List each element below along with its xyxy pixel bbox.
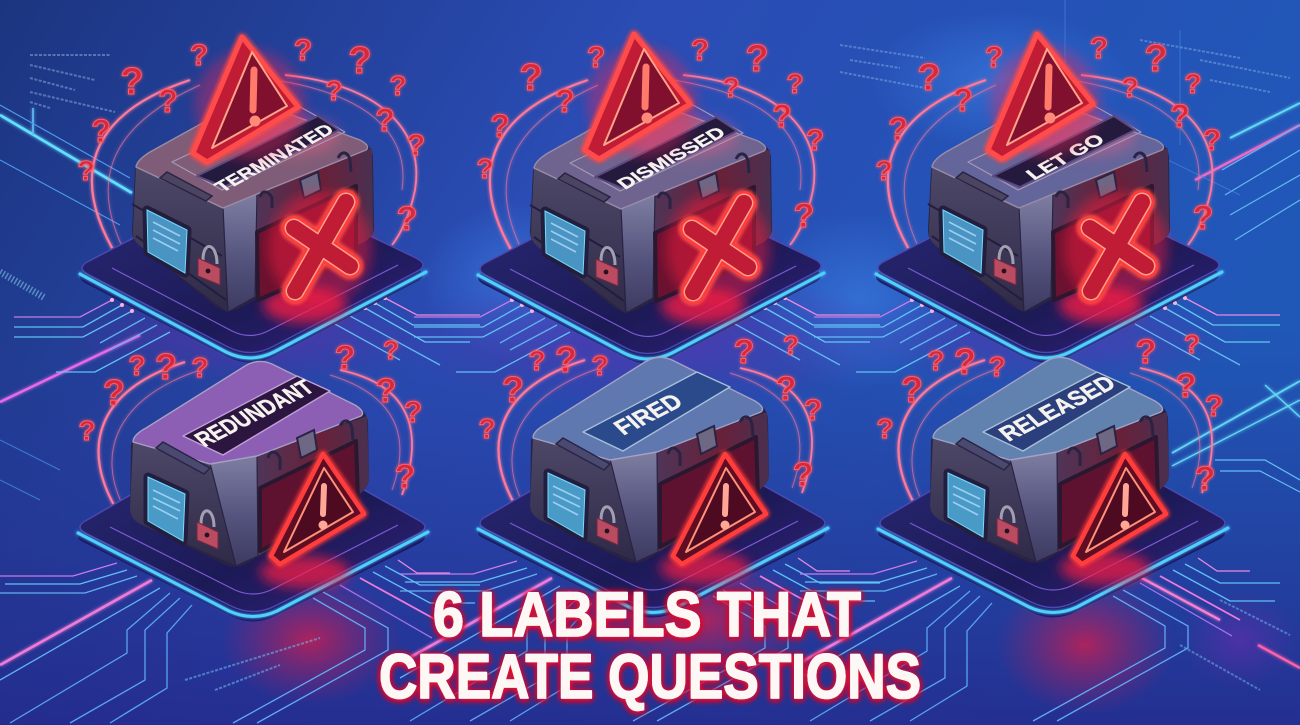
crate 6: Released [876, 329, 1228, 618]
question marks: ? [555, 83, 575, 119]
question marks: ? [490, 108, 510, 144]
label: Fired: FIRED [608, 389, 688, 439]
label: Redundant: REDUNDANT [189, 375, 320, 451]
question marks: ? [1144, 38, 1168, 80]
question marks: ? [772, 98, 792, 134]
question marks: ? [294, 34, 312, 67]
question marks: ? [395, 458, 415, 496]
question marks: ? [91, 113, 111, 149]
question marks: ? [190, 39, 208, 72]
question marks [875, 32, 1221, 237]
question marks: ? [776, 370, 796, 408]
question marks: ? [927, 345, 945, 376]
question marks: ? [1136, 333, 1156, 371]
question marks: ? [103, 372, 125, 413]
question marks: ? [502, 369, 524, 410]
warning triangle [585, 34, 697, 159]
question marks [476, 34, 824, 235]
warning triangle [271, 454, 364, 564]
crate 4: Redundant [78, 335, 428, 622]
question marks: ? [875, 155, 893, 186]
label: Released: RELEASED [993, 371, 1121, 446]
question marks: ? [476, 153, 494, 184]
question marks: ? [78, 415, 96, 446]
question marks: ? [376, 372, 396, 410]
question marks [77, 34, 425, 238]
question marks: ? [876, 413, 894, 444]
question marks: ? [988, 351, 1006, 382]
question marks: ? [1193, 199, 1213, 237]
X mark [1064, 192, 1168, 304]
question marks: ? [120, 61, 144, 103]
label plate [583, 372, 730, 451]
crate 5: Fired [478, 330, 828, 618]
question marks: ? [478, 413, 496, 444]
question marks: ? [407, 129, 425, 162]
label: Let Go: LET GO [1022, 131, 1110, 184]
question marks: ? [888, 111, 908, 147]
warning triangle [988, 34, 1100, 159]
question marks: ? [1203, 124, 1221, 157]
question marks: ? [1170, 98, 1190, 134]
question marks: ? [397, 200, 417, 238]
question marks: ? [804, 394, 822, 427]
question marks: ? [591, 350, 609, 381]
title: 6 LABELS THAT [433, 580, 861, 650]
question marks: ? [745, 38, 769, 80]
X mark [666, 193, 770, 305]
warning triangle [193, 37, 305, 162]
question marks: ? [734, 333, 754, 371]
question marks: ? [1090, 32, 1108, 65]
question marks: ? [1184, 329, 1200, 359]
question marks: ? [404, 396, 422, 429]
question marks: ? [191, 352, 209, 383]
label plate [983, 372, 1130, 451]
question marks: ? [128, 350, 146, 381]
question marks: ? [348, 40, 372, 82]
title [379, 580, 921, 712]
question marks: ? [691, 34, 709, 67]
question marks: ? [793, 456, 813, 494]
question marks: ? [806, 124, 824, 157]
question marks: ? [1176, 367, 1196, 405]
question marks: ? [722, 72, 740, 103]
question marks: ? [1195, 460, 1215, 498]
crate 3: Let Go [875, 32, 1222, 362]
warning triangle [1073, 454, 1166, 564]
question marks [478, 330, 822, 494]
question marks [78, 335, 422, 496]
question marks: ? [389, 70, 407, 101]
crate 2: Dismissed [476, 34, 824, 364]
question marks: ? [155, 346, 177, 387]
question marks: ? [786, 68, 804, 99]
question marks: ? [953, 82, 973, 118]
question marks: ? [375, 102, 395, 138]
crate 1: Terminated [77, 34, 426, 362]
warning triangle [673, 454, 766, 564]
question marks: ? [77, 155, 95, 186]
question marks: ? [519, 57, 543, 99]
label: Terminated: TERMINATED [211, 121, 339, 196]
question marks: ? [325, 75, 343, 106]
question marks: ? [158, 83, 178, 119]
question marks: ? [528, 345, 546, 376]
question marks [876, 329, 1223, 498]
question marks: ? [917, 57, 941, 99]
question marks: ? [587, 41, 605, 74]
question marks: ? [1184, 68, 1202, 99]
question marks: ? [1205, 390, 1223, 423]
title: CREATE QUESTIONS [379, 642, 921, 712]
question marks: ? [985, 41, 1003, 74]
label plate [183, 376, 330, 455]
question marks: ? [901, 369, 923, 410]
question marks: ? [555, 339, 577, 380]
question marks: ? [794, 197, 814, 235]
question marks: ? [383, 335, 399, 365]
question marks: ? [954, 341, 976, 382]
question marks: ? [1121, 72, 1139, 103]
X mark [268, 192, 372, 304]
question marks: ? [783, 330, 799, 360]
label: Dismissed: DISMISSED [613, 124, 731, 193]
question marks: ? [335, 339, 355, 377]
